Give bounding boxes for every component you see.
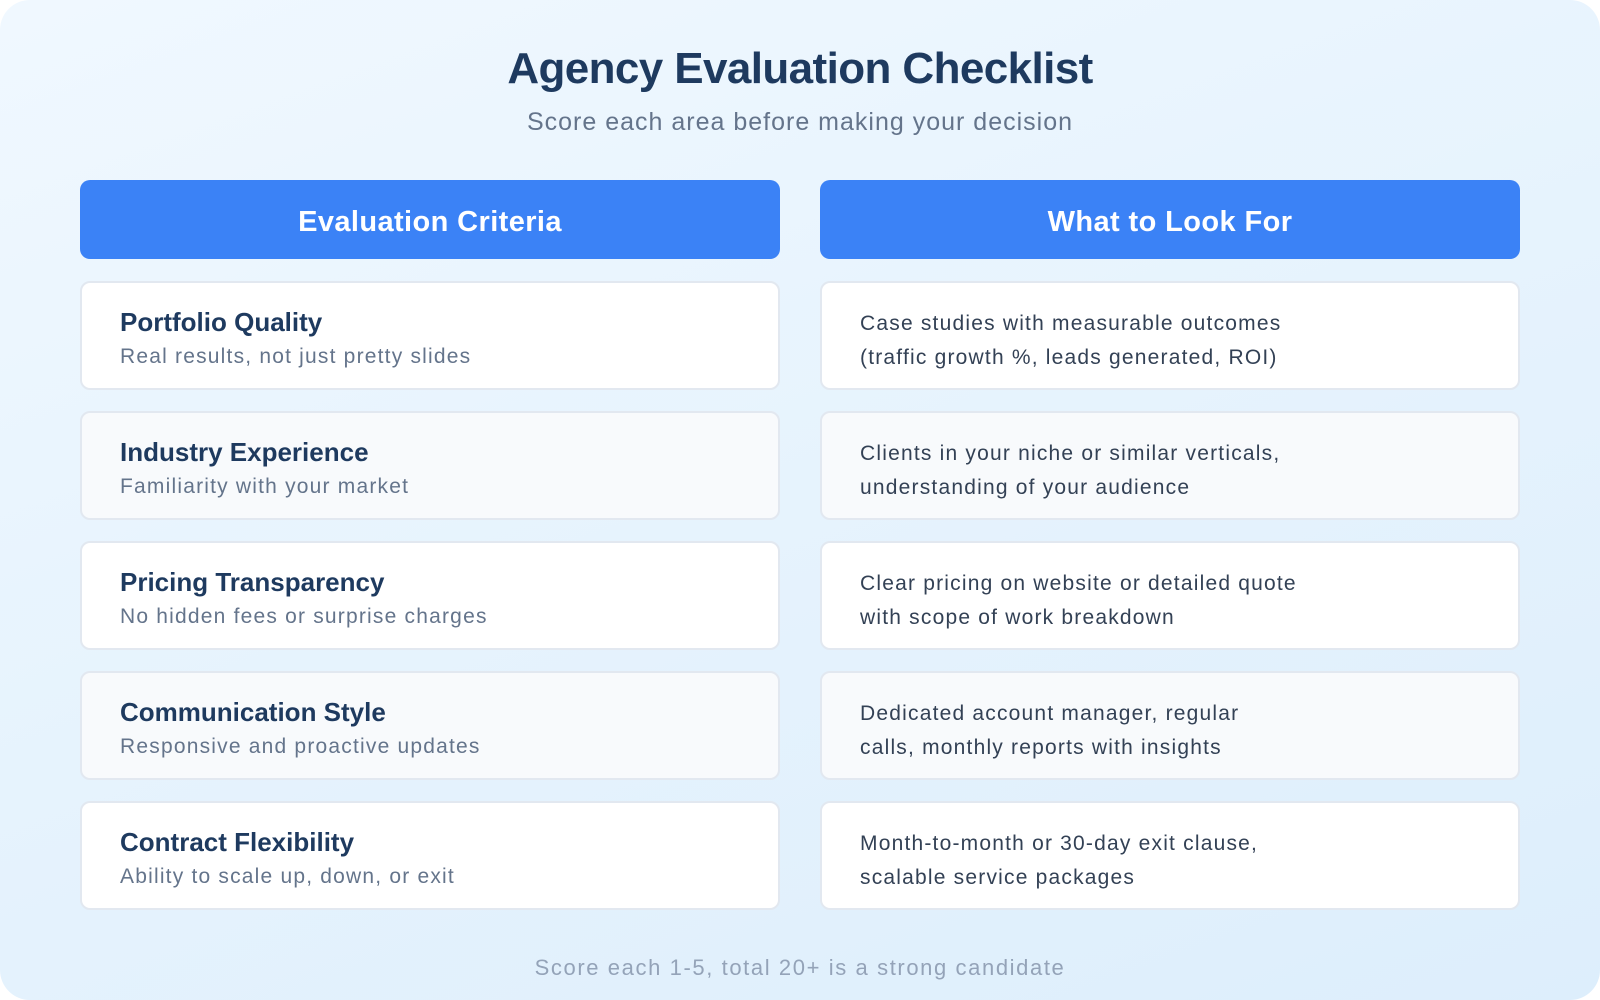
header: what to look for: What to Look For: [1048, 206, 1292, 238]
card: portfolio look for: (traffic growth %, leads generated, ROI): [860, 346, 1278, 369]
card: portfolio look for: [820, 281, 1520, 390]
card: contract look for: scalable service packages: [860, 866, 1135, 889]
card: communication look for: [820, 671, 1520, 780]
card: contract flexibility: Ability to scale up, down, or exit: [120, 865, 455, 888]
card: portfolio quality: Portfolio Quality: [120, 307, 322, 337]
card: industry experience: Familiarity with your market: [120, 475, 409, 498]
card: contract look for: [820, 801, 1520, 910]
card: pricing transparency: No hidden fees or surprise charges: [120, 605, 488, 628]
card: industry look for: understanding of your audience: [860, 476, 1190, 499]
header: evaluation criteria: Evaluation Criteria: [298, 206, 562, 238]
card: industry experience: Industry Experience: [120, 437, 369, 467]
card: industry experience: [80, 411, 780, 520]
header: evaluation criteria: [80, 180, 780, 259]
subtitle: Score each area before making your decision: [527, 108, 1073, 136]
card: contract flexibility: [80, 801, 780, 910]
card: portfolio quality: [80, 281, 780, 390]
card: portfolio quality: Real results, not just pretty slides: [120, 345, 471, 368]
card: industry look for: Clients in your niche or similar verticals,: [860, 442, 1280, 465]
card: communication style: Responsive and proactive updates: [120, 735, 481, 758]
footer note: Score each 1-5, total 20+ is a strong candidate: [535, 955, 1065, 980]
card: communication look for: Dedicated account manager, regular: [860, 702, 1239, 725]
card: contract flexibility: Contract Flexibility: [120, 827, 354, 857]
card: communication style: [80, 671, 780, 780]
card: pricing transparency: Pricing Transparency: [120, 567, 384, 597]
card: pricing look for: Clear pricing on website or detailed quote: [860, 572, 1297, 595]
card: pricing transparency: [80, 541, 780, 650]
card: pricing look for: [820, 541, 1520, 650]
title: Agency Evaluation Checklist: [507, 44, 1093, 93]
card: pricing look for: with scope of work breakdown: [860, 606, 1175, 629]
card: contract look for: Month-to-month or 30-day exit clause,: [860, 832, 1258, 855]
card: communication look for: calls, monthly reports with insights: [860, 736, 1222, 759]
card: communication style: Communication Style: [120, 697, 386, 727]
header: what to look for: [820, 180, 1520, 259]
card: industry look for: [820, 411, 1520, 520]
card: portfolio look for: Case studies with measurable outcomes: [860, 312, 1281, 335]
